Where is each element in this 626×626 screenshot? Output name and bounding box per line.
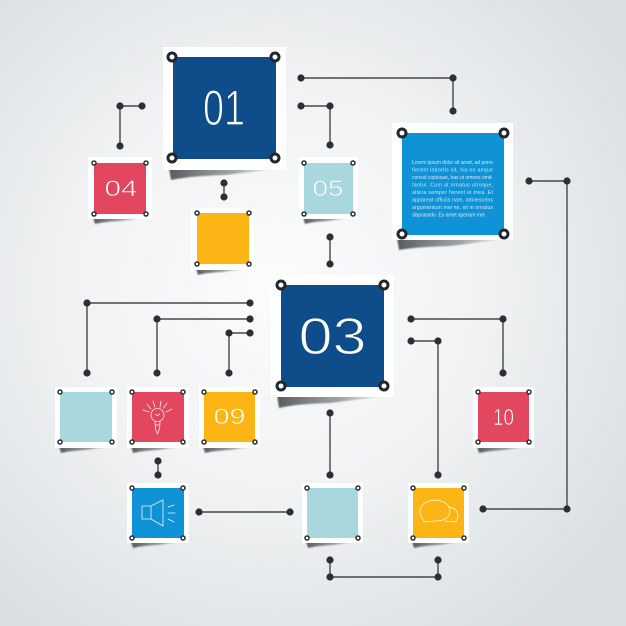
number 04: 04	[104, 176, 138, 201]
paragraph: appareat officiis nam, adolescens	[412, 198, 493, 204]
connectors	[83, 74, 571, 581]
card 10	[473, 387, 534, 453]
paragraph	[412, 160, 494, 218]
icon: speaker	[142, 500, 175, 526]
card bulb	[127, 387, 189, 453]
paragraph: altera semper fierent ei mea. Et	[412, 190, 494, 196]
number 05: 05	[312, 176, 344, 201]
card 01	[163, 47, 286, 180]
number 09: 09	[214, 404, 246, 429]
card 09	[199, 387, 260, 453]
paragraph: argumentum mei no, sit in ornatus	[412, 205, 493, 211]
card 03	[271, 275, 394, 408]
number 10: 10	[493, 404, 514, 430]
icon: light bulb	[143, 401, 172, 434]
paragraph: fierent lobortis sit, his ne aeque	[412, 168, 493, 174]
icon: speech bubbles	[420, 500, 458, 522]
card teal blank centre	[302, 483, 363, 548]
card 05	[299, 157, 358, 224]
number 03: 03	[298, 308, 366, 366]
card 04	[88, 157, 152, 224]
number 01: 01	[203, 80, 245, 136]
paragraph: disputando. Eu amet aperiam mei.	[412, 212, 486, 218]
paragraph: Lorem ipsum dolor sit amet, ad porro	[412, 160, 493, 166]
paragraph: tantur. Cum at ornatus utroque,	[412, 182, 493, 188]
card yellow blank	[191, 208, 254, 275]
card speaker	[127, 483, 189, 548]
card teal blank left	[55, 387, 117, 453]
card chat	[408, 483, 469, 548]
text card	[392, 123, 513, 250]
paragraph: consul copiosae, has ut omnes omit-	[412, 175, 493, 181]
